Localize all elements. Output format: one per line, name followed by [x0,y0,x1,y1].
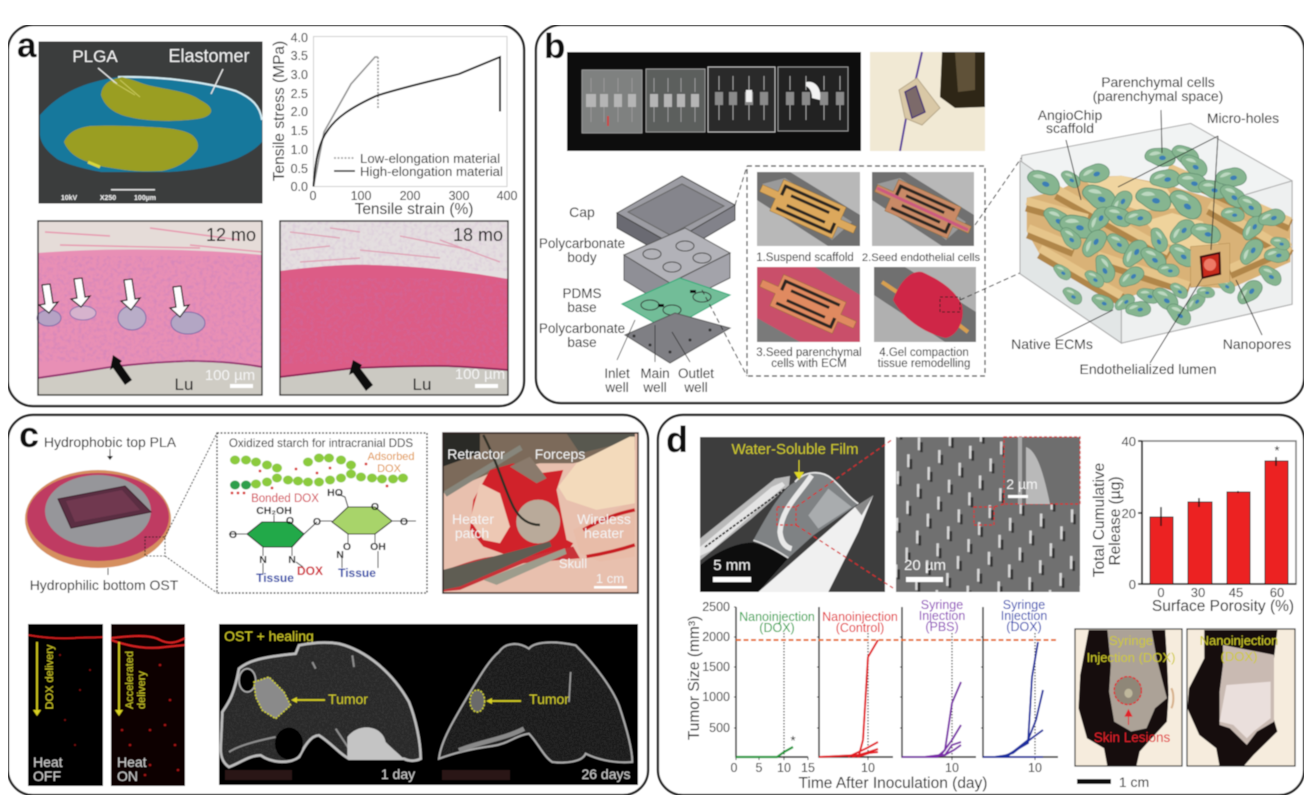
exploded device diagram: Main [640,366,670,381]
photo: four transparent chips [567,52,861,151]
patch diagram: Hydrophobic top PLA [44,434,177,450]
oxidized starch chemistry inset: O [229,529,237,541]
3D tissue cube schematic: Endothelialized lumen [1080,361,1216,377]
line charts: tumor size over time: Injection [919,609,965,623]
inset: single needle [1004,437,1080,504]
red series [819,640,878,757]
panel letter c: c [19,414,39,455]
exploded device diagram: well [642,380,667,395]
MRI day 1: 1 day [381,766,415,782]
line charts: tumor size over time: (DOX) [1006,620,1042,634]
bar chart: cumulative release: 0 [1157,585,1165,600]
bar chart: cumulative release: Release (µg) [1107,476,1124,566]
endothelialized lumen [1191,243,1230,287]
exploded device diagram: base [567,300,597,315]
exploded device diagram: Inlet [604,366,630,381]
exploded device diagram: well [683,380,708,395]
SEM image: PLGA in elastomer: Elastomer [168,46,250,66]
histology image: 12 months: 12 mo [206,225,256,245]
fluorescence image: heat on [111,624,185,786]
purple series [902,682,961,757]
oxidized starch chemistry inset: Oxidized starch for intracranial DDS [229,437,413,450]
oxidized starch chemistry inset: N [259,554,267,566]
surgical photo: Skull [559,556,587,571]
line charts: tumor size over time: 5 [756,761,763,775]
scale bar: 1 cm [1077,774,1149,790]
bar chart: cumulative release [1091,434,1296,615]
dashed box: four fabrication steps: 2.Seed endothelial cells [862,252,980,264]
tensile stress-strain chart: 4.0 [291,31,308,45]
exploded device diagram [539,176,735,395]
tan scaffold beams [1027,167,1290,300]
oxidized starch chemistry inset: O [400,516,408,528]
tensile stress-strain chart: 0.0 [291,180,308,194]
mouse photo: syringe injection [1075,629,1182,767]
line charts: tumor size over time: 1000 [702,690,730,704]
bar chart: cumulative release: Total Cumulative [1091,463,1108,577]
SEM image: PLGA in elastomer: PLGA [72,47,118,66]
surgical photo: Wireless [577,511,631,527]
histology image: 18 months [280,221,508,395]
tensile stress-strain chart: 0.5 [291,162,308,176]
tensile stress-strain chart: 300 [449,189,469,203]
line charts: tumor size over time: Tumor Size (mm³) [686,616,703,740]
oxidized starch chemistry inset: N [336,549,344,561]
line charts: tumor size over time: Syringe [1003,598,1045,612]
SEM image: PLGA in elastomer: 10kV [61,195,77,202]
exploded device diagram: Cap [569,204,595,220]
oxidized starch chemistry inset: O [371,501,379,513]
white arrows marking residual implant [39,278,189,317]
surgical photo: heater [584,525,624,541]
bar chart: cumulative release: Surface Porosity (%) [1152,598,1294,615]
oxidized starch chemistry inset: O [313,516,321,528]
line charts: tumor size over time [686,598,1058,792]
tensile stress-strain chart: 3.0 [291,68,308,82]
patch diagram [25,434,179,593]
bar chart: cumulative release: 30 [1191,585,1205,600]
histology image: 12 months [37,221,262,395]
histology image: 12 months: 100 µm [205,367,255,384]
3D tissue cube schematic: Parenchymal cells [1101,74,1215,90]
tensile stress-strain chart: 2.5 [291,87,308,101]
photo: implanted chip and pen tip [870,52,985,151]
tensile stress-strain chart: 100 [351,189,371,203]
line charts: tumor size over time: 10 [861,761,875,775]
histology image: 18 months: 100 µm [455,366,505,383]
MRI day 1: Tumor [328,691,368,707]
green chains [230,454,408,488]
black arrow [110,355,132,385]
3D tissue cube schematic: Micro-holes [1207,110,1279,126]
bar chart: cumulative release: 40 [1122,434,1136,449]
bar chart: cumulative release: * [1274,443,1280,458]
mouse photo: nanoinjection [1187,629,1295,767]
tensile stress-strain chart: 0 [310,189,317,203]
oxidized starch chemistry inset: Bonded DOX [251,493,319,505]
tensile stress-strain chart: 1.0 [291,143,308,157]
photo: water-soluble film in tweezers [700,437,885,592]
SEM image: PLGA in elastomer: X250 [100,195,116,202]
PDMS base [622,278,730,330]
oxidized starch chemistry inset: OH [370,541,386,553]
line charts: tumor size over time: (Control) [836,621,884,635]
tensile stress-strain chart: 400 [497,189,517,203]
line charts: tumor size over time: (PBS) [925,620,959,634]
panel letter d: d [666,419,688,460]
photo: water-soluble film in tweezers: 5 mm [713,557,751,574]
oxidized starch chemistry inset: DOX [377,463,402,475]
patch diagram: Hydrophilic bottom OST [30,577,179,593]
cap [617,176,735,258]
line charts: tumor size over time: 10 [777,761,791,775]
exploded device diagram: Polycarbonate [539,236,625,251]
step 1: suspend scaffold [754,172,862,246]
dashed box: four fabrication steps: cells with ECM [771,358,847,370]
step 2: seed endothelial cells [869,172,977,246]
bar chart: cumulative release: 0 [1129,577,1136,592]
dashed box: four fabrication steps: 1.Suspend scaffold [756,252,854,264]
line charts: tumor size over time: Time After Inoculation (day) [799,775,987,792]
dashed box: four fabrication steps: tissue remodelling [878,358,970,370]
tensile stress-strain chart: 2.0 [291,105,308,119]
tensile stress-strain chart: 1.5 [291,124,308,138]
line charts: tumor size over time: 2500 [702,600,730,614]
line charts: tumor size over time: 10 [945,761,959,775]
panel a: implant material and histology [8,25,524,406]
MRI day 26: 26 days [581,766,631,782]
oxidized starch chemistry inset: DOX [297,564,323,578]
SEM image: microneedle array [896,437,1080,592]
SEM image: PLGA in elastomer: 100µm [134,195,156,202]
surgical photo: Forceps [535,446,585,462]
oxidized starch chemistry inset: N [288,554,296,566]
MRI day 26: Tumor [529,691,569,707]
3D tissue cube schematic [1011,74,1292,377]
3D tissue cube schematic: AngioChip [1038,107,1103,123]
line charts: tumor size over time: 1500 [702,660,730,674]
line charts: tumor size over time: 0 [731,761,738,775]
dashed box: four fabrication steps [747,166,985,376]
surgical photo: 1 cm [596,571,624,586]
polycarbonate base [625,313,730,363]
tensile stress-strain chart: Tensile strain (%) [355,201,473,218]
green series [736,747,793,757]
line charts: tumor size over time: 500 [709,721,730,735]
dashed box: four fabrication steps: 4.Gel compaction [879,347,969,359]
exploded device diagram: PDMS [562,286,602,301]
mouse photo: syringe injection: Skin Lesions [1094,730,1171,745]
sugar rings [247,522,304,547]
tensile stress-strain chart: Tensile stress (MPa) [271,41,288,181]
zoom connector lines [702,157,1022,376]
MRI day 26 [436,639,636,782]
exploded device diagram: well [604,380,629,395]
3D tissue cube schematic: Native ECMs [1011,336,1093,352]
histology image: 18 months: Lu [413,375,431,394]
3D tissue cube schematic: scaffold [1046,120,1094,136]
oxidized starch chemistry inset: O [343,541,351,553]
mouse photo: nanoinjection: Nanoinjection [1200,633,1278,648]
blue series [983,642,1043,757]
fluorescence image: heat on: delivery [136,671,148,709]
MRI scans: OST + healing [224,628,314,644]
surgical photo: patch [455,525,489,541]
green parenchymal cells [1024,143,1291,328]
surgical photo: Heater [452,511,494,527]
dashed box: four fabrication steps: 3.Seed parenchymal [756,347,862,359]
oxidized starch chemistry inset: HO [327,487,343,499]
fluorescence image: heat off [28,624,103,786]
mouse photo: syringe injection: Syringe [1109,633,1153,648]
exploded device diagram: Outlet [678,366,714,381]
exploded device diagram: body [567,250,597,265]
MRI day 1 [219,639,426,782]
line charts: tumor size over time: Injection [1001,609,1047,623]
MRI scans [219,624,638,785]
fluorescence image: heat off: DOX delivery [44,644,56,709]
black arrow [349,360,373,391]
oxidized starch chemistry inset [217,433,427,593]
mouse photo: nanoinjection: (DOX) [1221,649,1257,664]
tensile stress-strain chart: 3.5 [291,49,308,63]
SEM image: PLGA in elastomer [39,42,262,203]
bar chart: cumulative release: 20 [1122,506,1136,521]
line charts: tumor size over time: 10 [1028,761,1042,775]
exploded device diagram: Polycarbonate [539,321,625,336]
oxidized starch chemistry inset: CH₂OH [256,505,292,517]
oxidized starch chemistry inset: Tissue [256,571,294,585]
polycarbonate body [624,228,730,308]
inset: single needle: 2 µm [1006,476,1038,492]
tensile stress-strain chart: High-elongation material [360,164,503,179]
panel d: nanoinjection [658,415,1304,795]
exploded device diagram: base [567,335,597,350]
SEM image: microneedle array: 20 µm [904,557,946,574]
tensile stress-strain chart: 200 [400,189,420,203]
fluorescence image: heat off: OFF [33,768,61,784]
fluorescence image: heat off: Heat [33,754,63,770]
line charts: tumor size over time: Syringe [921,598,963,612]
surgical photo: Retractor [447,446,505,462]
3D tissue cube schematic: Nanopores [1223,336,1291,352]
line charts: tumor size over time: Nanoinjection [739,610,815,624]
line charts: tumor size over time: 2000 [702,630,730,644]
line charts: tumor size over time: Nanoinjection [822,610,898,624]
surgical photo [443,433,638,593]
scale bar: 1 cm: 1 cm [1119,774,1149,790]
panel c: OST patch drug delivery [8,414,648,795]
step 4: gel compaction [874,267,976,342]
mouse photo: syringe injection: Injection (DOX) [1087,650,1175,665]
histology image: 18 months: 18 mo [453,225,503,245]
panel letter b: b [544,27,565,66]
fluorescence image: heat on: ON [117,768,138,784]
panel b: AngioChip device [536,25,1304,403]
oxidized starch chemistry inset: Adsorbed [367,451,415,463]
tensile stress-strain chart [271,31,517,218]
fluorescence image: heat on: Heat [117,754,147,770]
line charts: tumor size over time: 15 [801,761,815,775]
histology image: 12 months: Lu [175,375,193,394]
oxidized starch chemistry inset: O [286,515,294,527]
photo: water-soluble film in tweezers: Water-Soluble Film [732,441,858,458]
panel letter a: a [17,26,37,65]
line charts: tumor size over time: * [790,733,796,748]
step 3: seed parenchymal cells [754,267,862,342]
bar chart: cumulative release: 60 [1270,585,1284,600]
oxidized starch chemistry inset: Tissue [338,566,376,580]
fluorescence image: heat on: Accelerated [124,651,136,709]
tensile stress-strain chart: Low-elongation material [360,151,500,166]
line charts: tumor size over time: (DOX) [759,621,795,635]
bar chart: cumulative release: 45 [1229,585,1243,600]
3D tissue cube schematic: (parenchymal space) [1093,88,1223,104]
